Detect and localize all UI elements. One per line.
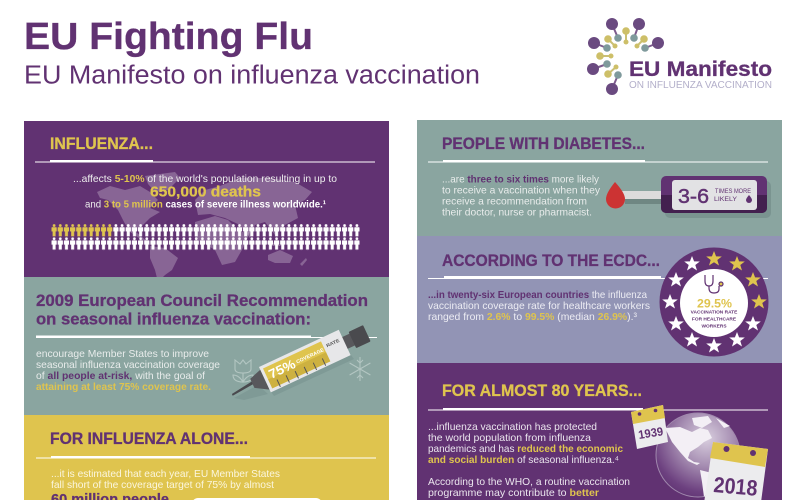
icon: syringe: COVERAGE <box>295 347 326 365</box>
body text: of all people at-risk, with the goal of <box>36 370 205 382</box>
panel: people with diabetes <box>417 120 782 236</box>
logo: EU Manifesto <box>587 18 772 95</box>
icon: tulip <box>233 360 253 382</box>
panel: for almost 80 years <box>417 363 782 500</box>
body text <box>36 348 220 393</box>
statistics text: 650,000 deaths <box>150 184 261 200</box>
icon: calendar 2018 <box>703 442 768 500</box>
heading <box>36 291 368 328</box>
badge caption <box>691 310 738 330</box>
logo molecule icon <box>587 18 664 95</box>
title: EU Fighting Flu <box>24 16 313 58</box>
body text: their doctor, nurse or pharmacist. <box>442 206 592 218</box>
people pictogram <box>51 224 360 250</box>
statistics text: and 3 to 5 million cases of severe illness worldwide.¹ <box>85 198 326 210</box>
world map <box>97 172 312 282</box>
heading: ACCORDING TO THE ECDC... <box>442 251 660 270</box>
panel: 2009 recommendation <box>24 277 389 416</box>
heading: PEOPLE WITH DIABETES... <box>442 135 645 153</box>
icon: syringe: RATE <box>325 338 340 348</box>
body text <box>428 421 630 499</box>
body text: programme may contribute to better <box>428 487 599 499</box>
body text: to receive a vaccination when they <box>442 184 601 196</box>
badge caption: FOR HEALTHCARE <box>692 316 737 322</box>
panel: for influenza alone <box>24 415 389 500</box>
heading: 2009 European Council Recommendation <box>36 291 368 310</box>
body text: the world population from influenza <box>428 432 591 444</box>
calendar year: 1939 <box>637 424 664 442</box>
subtitle: EU Manifesto on influenza vaccination <box>24 62 480 90</box>
icon: snowflake <box>350 357 370 381</box>
heading: FOR INFLUENZA ALONE... <box>50 430 248 448</box>
body text: ...influenza vaccination has protected <box>428 421 597 433</box>
heading: FOR ALMOST 80 YEARS... <box>442 382 642 400</box>
syringe label: 75% <box>266 356 298 382</box>
body text: and social burden of seasonal influenza.⁴ <box>428 454 619 466</box>
body text: ...in twenty-six European countries the influenza <box>428 289 647 301</box>
panel: influenza <box>24 121 389 282</box>
logo tagline: ON INFLUENZA VACCINATION <box>629 79 772 91</box>
body text <box>51 468 280 491</box>
icon: glucose meter: LIKELY <box>714 197 737 203</box>
logo wordmark: EU Manifesto <box>629 58 772 81</box>
body text: ...it is estimated that each year, EU Member States <box>51 468 280 480</box>
statistics text: ...affects 5-10% of the world's population resulting in up to <box>73 173 337 185</box>
icon: calendar 1939 <box>631 405 668 449</box>
body text: seasonal influenza vaccination coverage <box>36 359 220 371</box>
badge caption: WORKERS <box>701 324 727 330</box>
ring of stars <box>662 251 767 352</box>
icon: syringe <box>226 320 372 408</box>
body text <box>442 174 601 218</box>
white callout box <box>192 498 322 500</box>
body text: ranged from 2.6% to 99.5% (median 26.9%).³ <box>428 311 637 323</box>
body text: pandemics and has reduced the economic <box>428 443 623 455</box>
icon: glucose meter <box>606 176 771 218</box>
body text: encourage Member States to improve <box>36 348 209 360</box>
body text: ...are three to six times more likely <box>442 174 600 186</box>
badge figure: 29.5% <box>697 296 732 310</box>
body text: fall short of the coverage target of 75% by almost <box>51 479 274 491</box>
badge caption: VACCINATION RATE <box>691 310 738 316</box>
panel: according to the ECDC <box>417 236 782 364</box>
heading: on seasonal influenza vaccination: <box>36 310 311 328</box>
icon: globe <box>656 413 740 497</box>
meter reading: 3-6 <box>678 186 709 208</box>
EU stars badge <box>660 248 768 356</box>
body text: attaining at least 75% coverage rate. <box>36 381 211 393</box>
icon: stethoscope <box>705 275 723 293</box>
heading: INFLUENZA... <box>50 135 153 153</box>
body text: receive a recommendation from <box>442 196 587 208</box>
body text: According to the WHO, a routine vaccination <box>428 476 630 488</box>
body text <box>428 289 650 323</box>
statistics text <box>73 173 337 210</box>
icon: glucose meter: TIMES MORE <box>715 189 751 195</box>
body text: vaccination coverage rate for healthcare workers <box>428 300 650 312</box>
